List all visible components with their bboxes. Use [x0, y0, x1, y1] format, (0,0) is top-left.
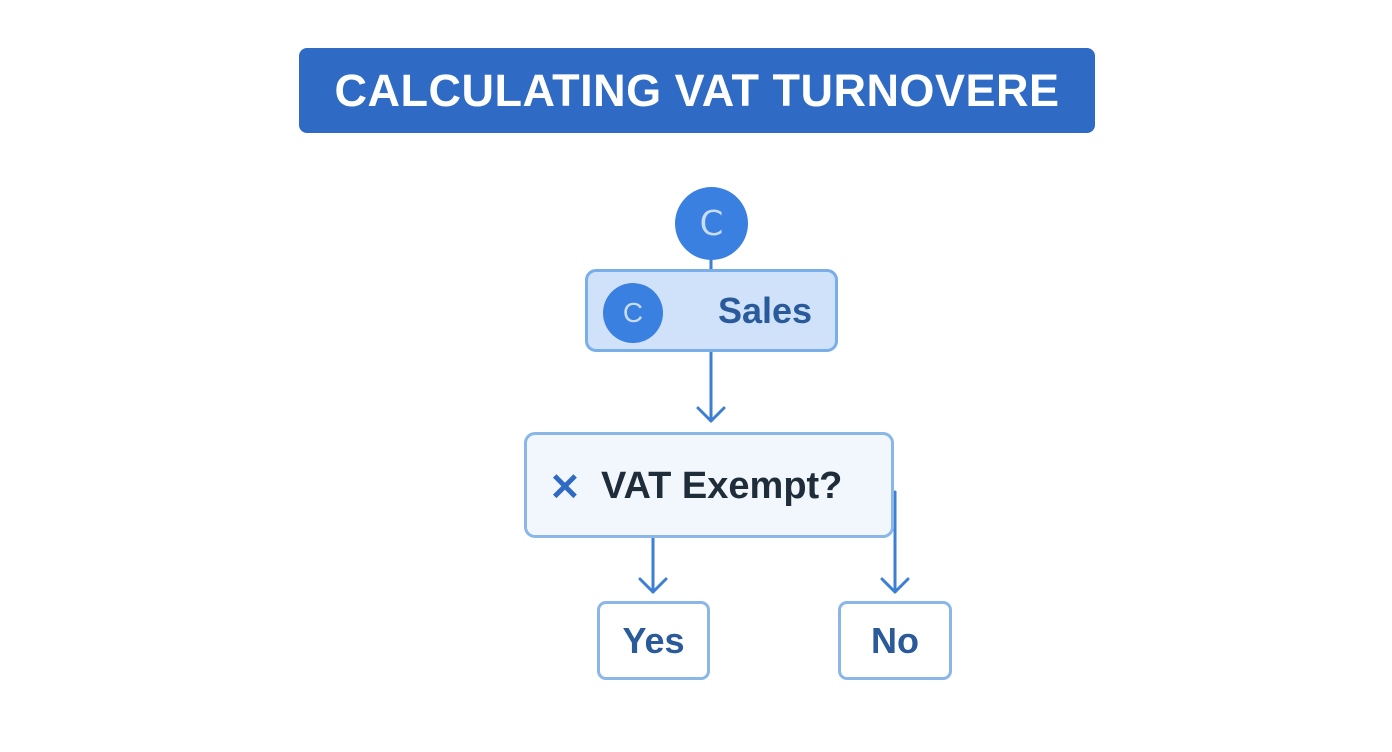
box: yes	[597, 601, 710, 680]
icon: top circle: 𝖢	[700, 204, 723, 242]
panel: sales	[585, 269, 838, 352]
icon: top circle	[675, 187, 748, 260]
panel: vat exempt	[524, 432, 894, 538]
box: yes: Yes	[622, 620, 685, 660]
box: no: No	[871, 620, 919, 660]
icon: sales circle	[603, 283, 663, 343]
icon: x: ✕	[549, 467, 581, 509]
question text: VAT Exempt?	[601, 465, 842, 507]
icon: sales circle: C	[623, 297, 643, 328]
box: no	[838, 601, 952, 680]
title: CALCULATING VAT TURNOVERE	[335, 64, 1059, 116]
title	[299, 48, 1095, 133]
sales label: Sales	[718, 290, 812, 331]
